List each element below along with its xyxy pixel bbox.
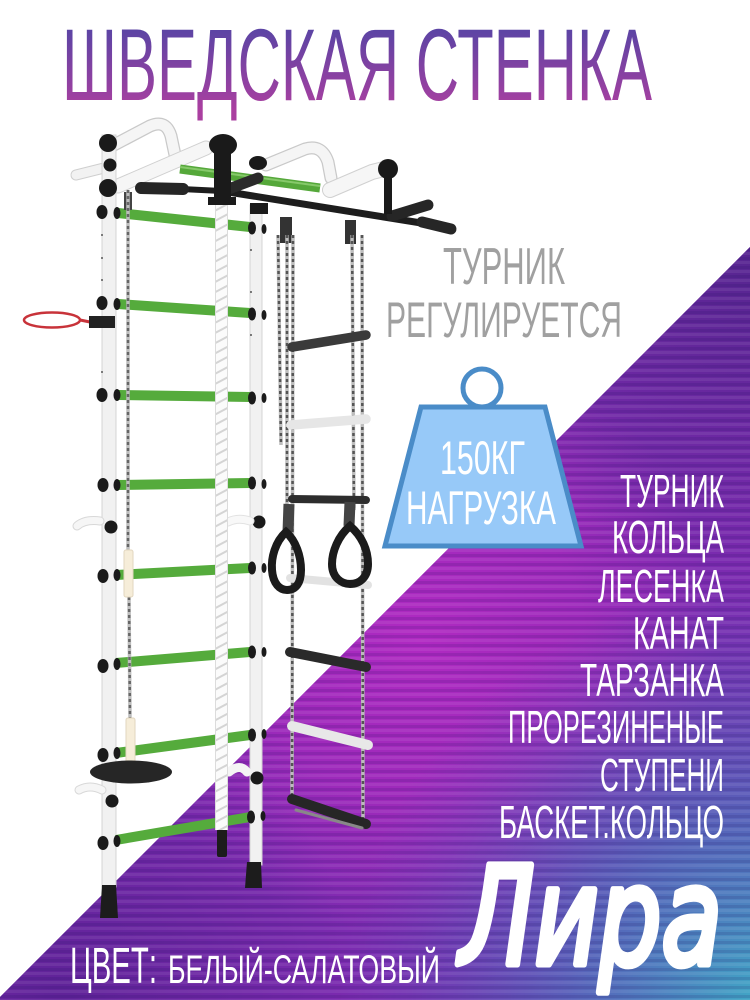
- ladder rungs: [290, 335, 368, 828]
- top green bar: [180, 167, 320, 188]
- basketball ring: [24, 312, 115, 328]
- weight badge: 150 kg load: НАГРУЗКА: [406, 481, 556, 534]
- purple gradient diagonal background: [0, 247, 750, 1000]
- green rungs: [116, 213, 250, 840]
- left post: [102, 135, 116, 887]
- tarzan swing: [90, 190, 172, 784]
- ladder ropes: [278, 235, 363, 820]
- wall brackets: [77, 519, 250, 790]
- weight badge: 150 kg load: [385, 369, 581, 546]
- bolts: [96, 158, 266, 850]
- note: adjustable bar: ТУРНИК: [443, 238, 565, 296]
- colour label: [70, 937, 440, 994]
- top white arches: [76, 124, 388, 190]
- note: adjustable bar: [386, 238, 622, 348]
- weight badge: 150 kg load: 150КГ: [440, 431, 525, 484]
- colour label: ЦВЕТ:: [70, 937, 157, 994]
- black hubs and clamps: [99, 134, 398, 244]
- post mounting dots: [101, 234, 252, 373]
- gymnastic rings: [272, 502, 368, 590]
- feature list: [499, 465, 724, 848]
- colour label: БЕЛЫЙ-САЛАТОВЫЙ: [168, 946, 440, 992]
- wall bars equipment: [24, 124, 451, 918]
- pull-up bar: [140, 178, 451, 229]
- right post: [250, 205, 262, 865]
- post feet: [100, 829, 262, 918]
- climbing rope: [215, 205, 228, 830]
